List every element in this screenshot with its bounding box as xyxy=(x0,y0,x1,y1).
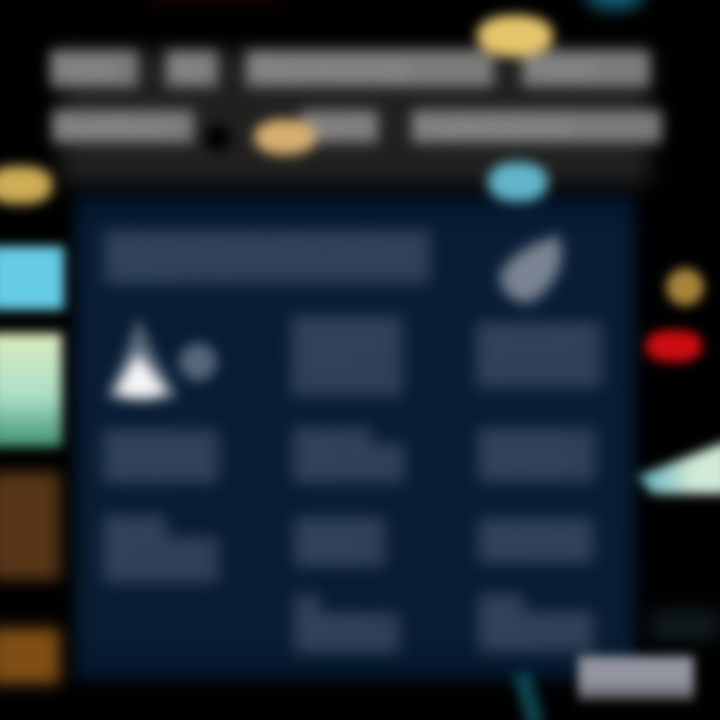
tip: column 3 second: Maintain your equipment and check it often xyxy=(478,429,570,480)
title word: Maximizing xyxy=(246,50,494,87)
top glow: dark red xyxy=(150,0,280,4)
title word: Outdoor: Outdoor xyxy=(52,110,170,143)
top glow: teal xyxy=(585,0,645,10)
badge: red right xyxy=(646,330,702,362)
title word: Experience xyxy=(412,110,662,143)
right glow: dim teal xyxy=(650,610,720,640)
tip: column 1 second: Pack water and snacks for long days xyxy=(103,516,199,567)
title word: Sports: Sports xyxy=(300,113,376,140)
title xyxy=(40,40,672,152)
title word: Your: Your xyxy=(522,50,597,87)
title word: Your xyxy=(522,50,650,87)
column 1 text xyxy=(97,424,224,588)
panel: main tips panel xyxy=(75,195,635,680)
title word: Tips: Tips xyxy=(50,50,115,86)
badge: gold left xyxy=(0,166,52,204)
tip: column 1 second xyxy=(103,515,219,583)
title word: for: for xyxy=(166,50,209,86)
badge: teal tab xyxy=(488,162,548,202)
icon: mountain xyxy=(102,316,224,410)
title haze xyxy=(60,50,650,185)
highlight: gold word in title xyxy=(254,119,316,155)
column 3 text xyxy=(470,316,608,658)
tip: column 2 first: Wear layers that suit the season and terrain xyxy=(291,317,391,368)
badge: gold right xyxy=(666,268,704,306)
streak: teal bottom xyxy=(513,671,545,720)
tip: column 3 third: Respect wildlife and leave no trace xyxy=(478,519,591,552)
left photo: brown xyxy=(0,472,60,580)
intro text: Get the most from every outdoor trip with careful planning, proper gear and an eye on the weather conditions xyxy=(104,231,430,283)
left photo: orange-brown xyxy=(0,628,60,684)
column 2 text xyxy=(285,310,410,659)
tip: column 3 first: Choose routes that match your skill level xyxy=(476,323,594,374)
dark spot in title xyxy=(205,125,231,151)
button: grey bottom right xyxy=(578,656,694,700)
right photo: pale teal wedge xyxy=(632,434,720,504)
left photo: sky xyxy=(0,246,64,310)
tip: column 3 fourth: Capture the moment and enjoy the views xyxy=(478,595,593,646)
tip: column 2 fourth: Rest well and stretch after each day xyxy=(294,596,377,647)
title word: Experience: Experience xyxy=(412,110,572,143)
tip: column 2 first xyxy=(291,316,403,396)
left photo: pale green xyxy=(0,333,62,447)
tip: column 2 second: Bring a first aid kit and a charged phone xyxy=(293,428,400,479)
title word: Maximizing: Maximizing xyxy=(246,52,408,85)
badge: gold top xyxy=(477,15,553,57)
tip: column 2 fourth xyxy=(294,595,400,653)
icon: compass xyxy=(491,228,571,312)
